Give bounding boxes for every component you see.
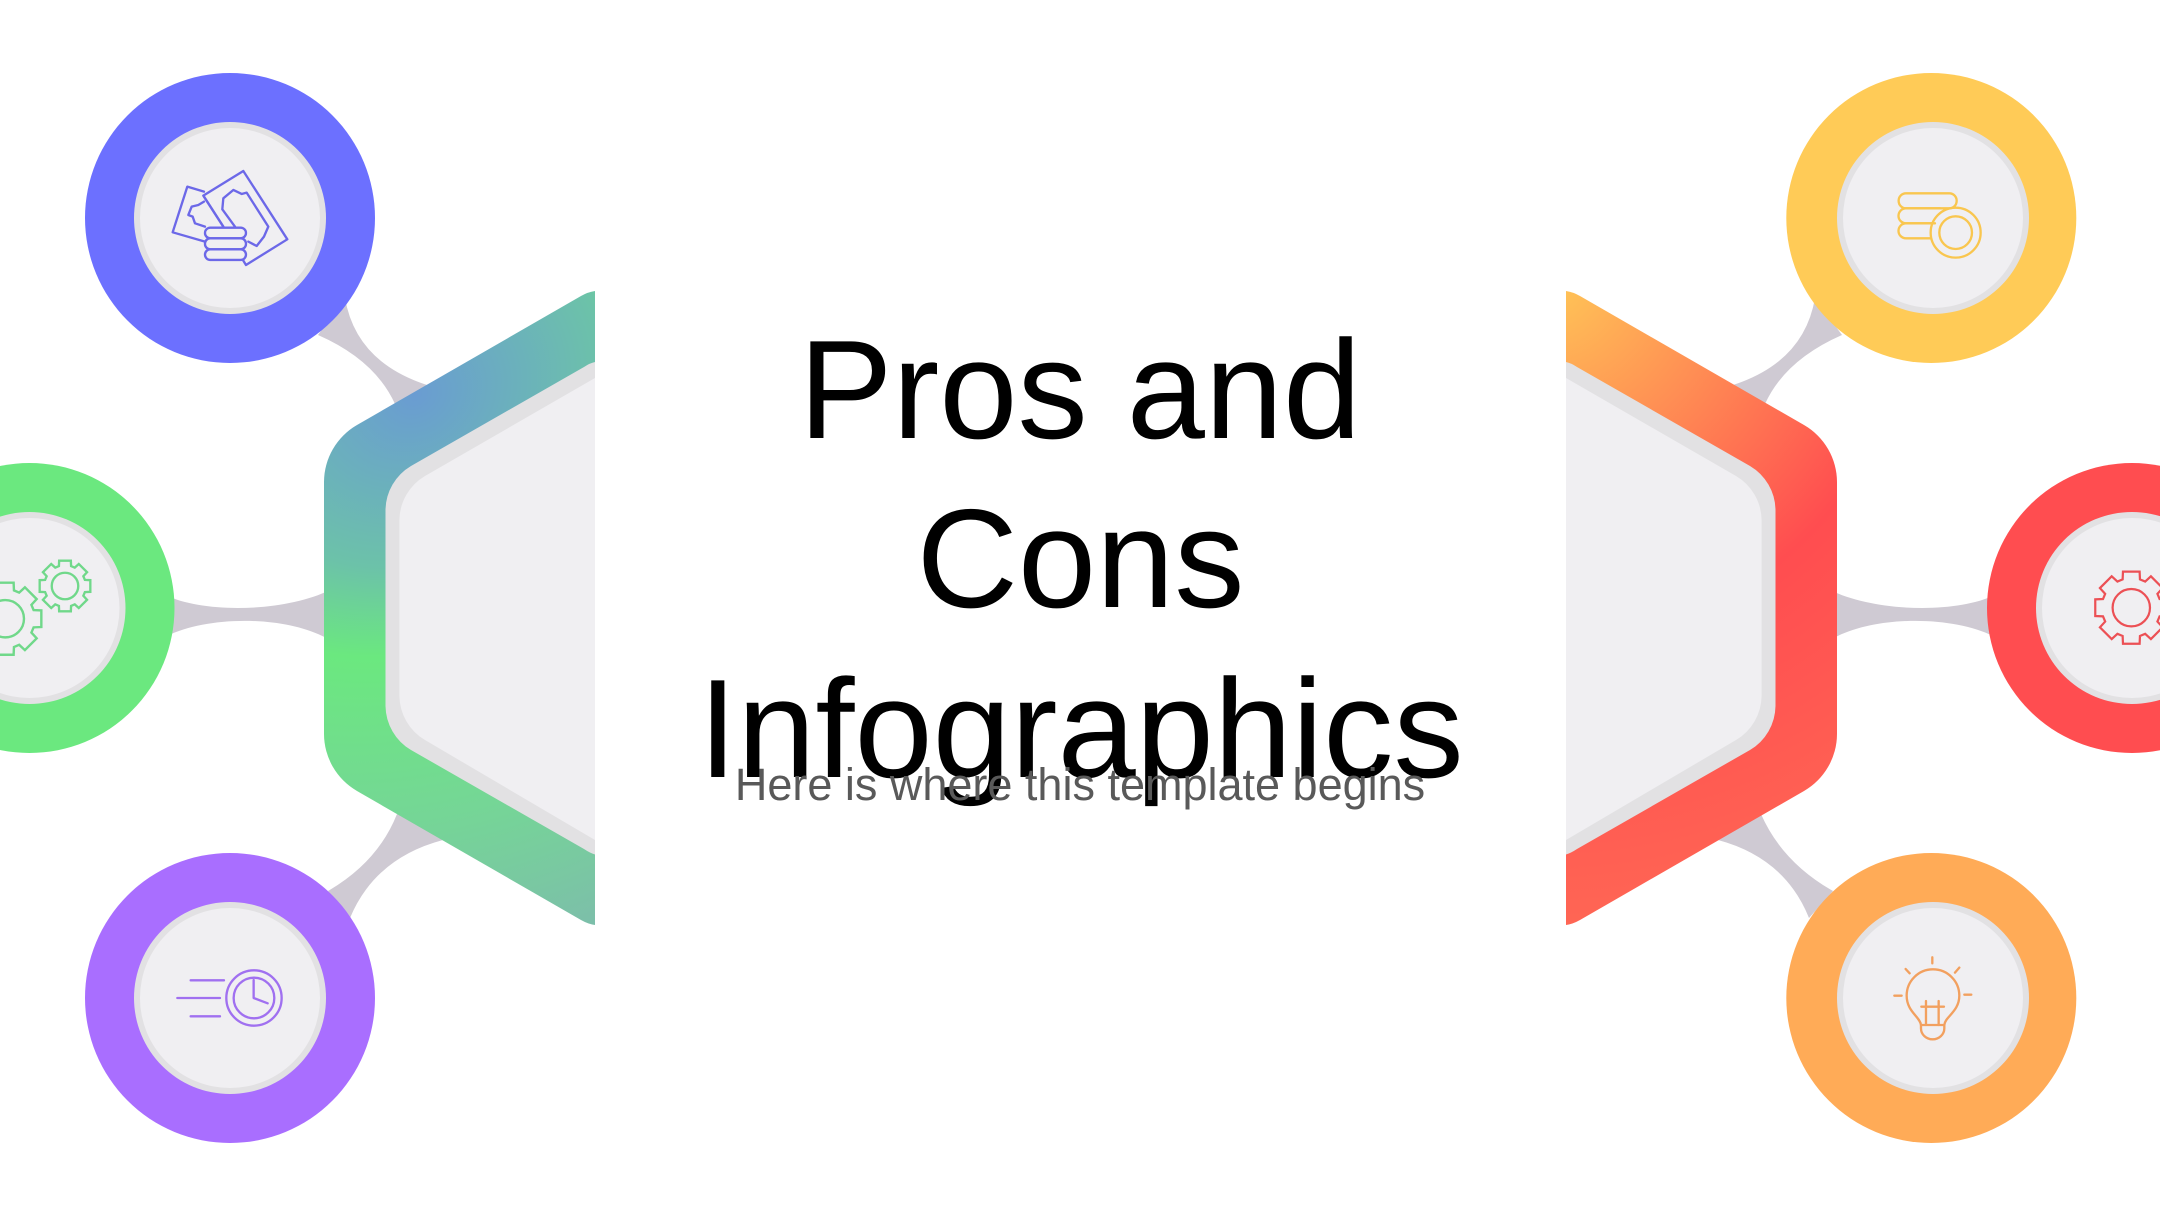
icon: banknotes and coins (173, 171, 287, 265)
panel: left hexagon (324, 291, 595, 925)
node: red gear (1987, 463, 2160, 753)
title: Pros and (799, 311, 1361, 468)
subtitle: Here is where this template begins (735, 759, 1425, 810)
icon: gears (0, 561, 90, 655)
title: Cons (916, 480, 1244, 637)
connector: middle right (1830, 590, 1995, 640)
connector: middle left (165, 590, 330, 640)
node: orange idea (1786, 853, 2076, 1143)
icon: fast clock (177, 970, 282, 1026)
connector: top left (318, 298, 440, 410)
title (698, 311, 1464, 807)
icon: gear (2095, 572, 2160, 644)
icon: coins (1898, 193, 1981, 258)
icon: light bulb (1894, 957, 1971, 1039)
node: green gears (0, 463, 174, 753)
connector: bottom left (328, 814, 443, 918)
panel: right hexagon (1566, 291, 1837, 925)
node: purple clock (85, 853, 375, 1143)
connector: top right (1720, 298, 1842, 410)
node: blue money (85, 73, 375, 363)
node: yellow coins (1786, 73, 2076, 363)
connector: bottom right (1718, 814, 1833, 918)
title: Infographics (698, 650, 1464, 807)
